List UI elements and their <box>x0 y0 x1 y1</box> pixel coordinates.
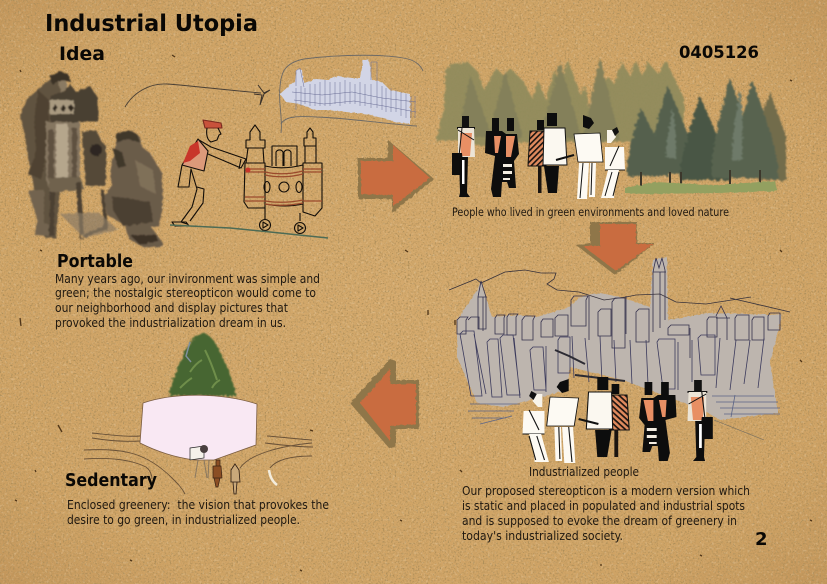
enclosed tree <box>169 333 236 396</box>
text: proposed stereopticon: and is supposed to evoke the dream of greenery in <box>462 514 737 528</box>
screen <box>140 395 257 460</box>
text: proposed stereopticon <box>462 484 750 543</box>
heading: Idea: Idea <box>59 43 105 65</box>
icon: bird <box>254 85 270 105</box>
page number: 2 <box>755 529 768 550</box>
ground line <box>170 225 328 238</box>
title: Industrial Utopia <box>45 11 258 37</box>
text: nostalgic stereopticon <box>55 272 320 330</box>
front row of trees <box>625 78 786 194</box>
figure: man <box>172 120 246 226</box>
group of industrialized people <box>522 377 713 463</box>
city sketch <box>449 257 790 440</box>
stereopticon <box>50 84 98 122</box>
left man <box>20 78 78 238</box>
text: enclosed greenery: Enclosed greenery: the vision that provokes the <box>67 498 329 512</box>
caption: industrialized people: Industrialized people <box>529 465 639 479</box>
text: nostalgic stereopticon: green; the nostalgic stereopticon would come to <box>55 286 316 300</box>
text: proposed stereopticon: today's industrialized society. <box>462 529 623 543</box>
heading: Portable: Portable <box>57 251 133 272</box>
text: proposed stereopticon: is static and placed in populated and industrial spots <box>462 499 745 513</box>
student number: 0405126 <box>679 43 759 63</box>
right man <box>104 131 163 247</box>
figure: cart <box>244 125 322 234</box>
text: nostalgic stereopticon: Many years ago, our invironment was simple and <box>55 272 320 286</box>
small viewers <box>190 445 240 494</box>
text: enclosed greenery: desire to go green, in industrialized people. <box>67 513 300 527</box>
cartoon: man pushing the stereopticon cart <box>170 120 328 238</box>
arrow: right <box>358 140 434 213</box>
roads <box>84 433 313 494</box>
group of people in nature <box>452 113 625 199</box>
arrow: left <box>350 359 419 448</box>
ground strip <box>625 181 777 194</box>
arrow: down <box>576 222 655 275</box>
flight path <box>125 84 261 107</box>
text: proposed stereopticon: Our proposed stereopticon is a modern version which <box>462 484 750 498</box>
text: enclosed greenery <box>67 498 329 527</box>
photo: two men at a stereopticon <box>20 71 163 247</box>
heading: Sedentary: Sedentary <box>65 470 157 491</box>
caption: people in nature: People who lived in green environments and loved nature <box>452 205 729 219</box>
tripod legs <box>49 182 108 240</box>
back row of trees <box>436 58 684 146</box>
skyline <box>449 270 790 312</box>
text: nostalgic stereopticon: our neighborhood and display pictures that <box>55 301 288 315</box>
text: nostalgic stereopticon: provoked the industrialization dream in us. <box>55 316 286 330</box>
buildings <box>457 258 780 358</box>
thought bubble with city <box>280 55 423 133</box>
